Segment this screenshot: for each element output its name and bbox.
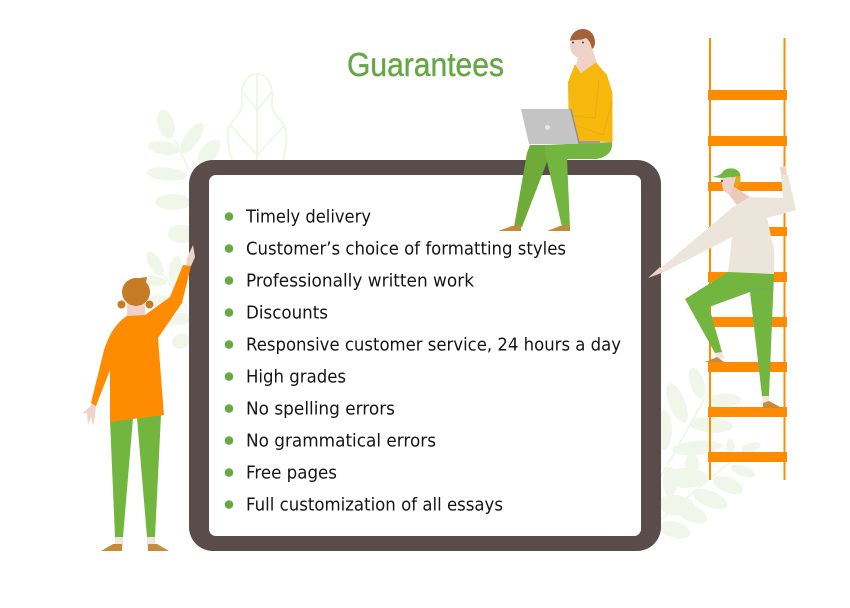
orange sweater (91, 265, 191, 422)
person: woman pointing (82, 245, 195, 551)
title: Guarantees (347, 46, 504, 83)
head with cap (712, 168, 740, 195)
guarantees list (225, 206, 621, 516)
guarantees list: Timely delivery (245, 206, 371, 228)
guarantees list: No grammatical errors (246, 430, 436, 452)
guarantees list: Professionally written work (246, 270, 475, 292)
beige sweater (662, 175, 796, 274)
background fern: upper left (147, 107, 225, 243)
background fern: lower right (656, 366, 762, 542)
guarantees list: Full customization of all essays (246, 494, 503, 516)
person: man climbing ladder (648, 166, 796, 408)
ladder (708, 38, 787, 480)
background fern: behind woman (141, 249, 192, 351)
laptop (521, 109, 600, 144)
socks and shoes (705, 351, 782, 408)
background leaf outline (228, 74, 286, 160)
guarantees list: High grades (246, 366, 346, 388)
guarantees list: Customer’s choice of formatting styles (246, 238, 566, 260)
guarantees list: Free pages (246, 462, 337, 484)
neck (127, 303, 145, 318)
hands (82, 245, 195, 426)
head (570, 29, 597, 74)
person: sitting with laptop (498, 29, 612, 231)
guarantees list: Discounts (246, 302, 328, 324)
guarantees list: Responsive customer service, 24 hours a day (246, 334, 621, 356)
trousers (498, 142, 612, 231)
guarantees list: No spelling errors (246, 398, 395, 420)
head with pigtails (118, 277, 154, 308)
hands and neck (648, 166, 787, 278)
legs (101, 415, 169, 551)
green trousers (685, 272, 774, 396)
panel: guarantees board (189, 160, 661, 551)
yellow sweater (568, 62, 612, 142)
